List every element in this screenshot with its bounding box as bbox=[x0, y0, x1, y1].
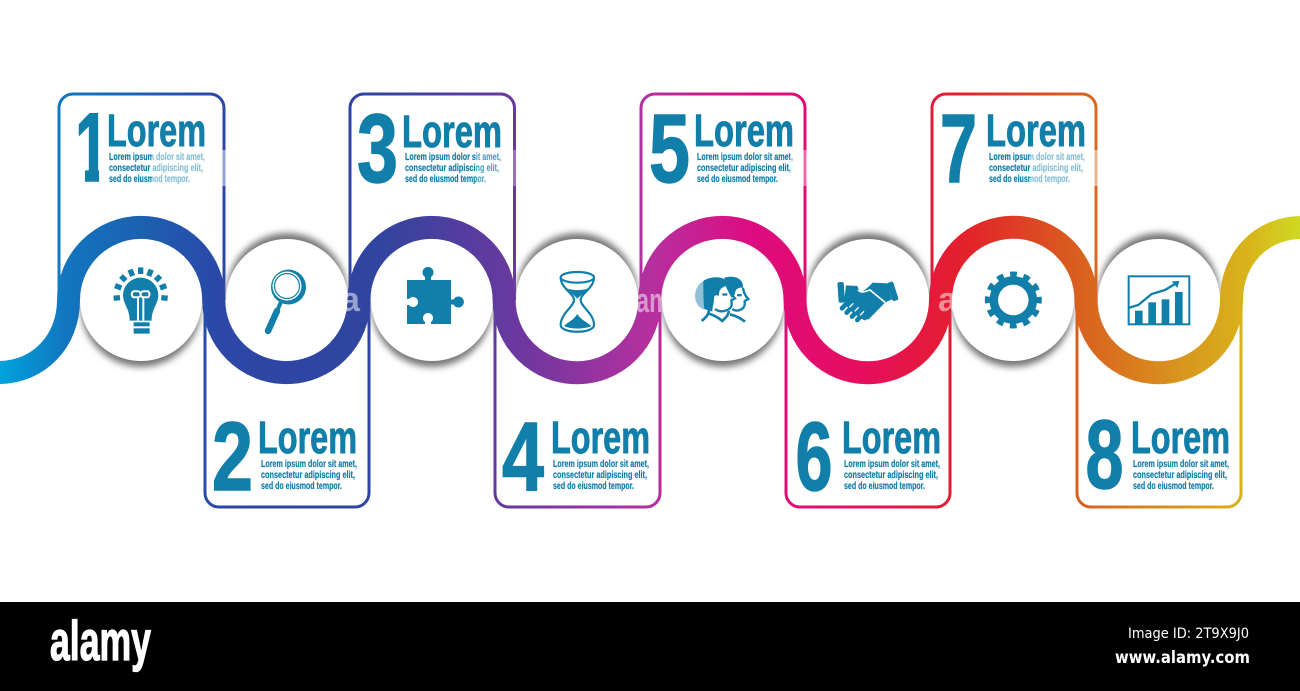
icon: puzzle piece bbox=[407, 267, 464, 324]
alamy logo: alamy bbox=[50, 609, 151, 672]
step 5 text: consectetur adipiscing elit, bbox=[697, 163, 791, 174]
step 2 text: sed do eiusmod tempor. bbox=[261, 481, 342, 492]
icon: light bulb bbox=[114, 267, 168, 334]
icon: growth chart bbox=[1129, 276, 1189, 324]
icon: magnifying glass bbox=[268, 270, 306, 331]
circle shadows bbox=[81, 233, 1219, 367]
website: www.alamy.com bbox=[1115, 648, 1250, 668]
step 6 text: sed do eiusmod tempor. bbox=[844, 481, 925, 492]
step 3 text bbox=[357, 94, 502, 203]
step 2 text: Lorem ipsum dolor sit amet, bbox=[261, 459, 357, 470]
step 8 text: Lorem bbox=[1131, 412, 1230, 463]
step 7 text: 7 bbox=[940, 94, 977, 203]
step 3 text: sed do eiusmod tempor. bbox=[405, 174, 486, 185]
watermark fade: a bbox=[938, 281, 958, 319]
white circles bbox=[80, 239, 1220, 361]
step 6 text: consectetur adipiscing elit, bbox=[844, 470, 938, 481]
step 1 text bbox=[78, 113, 205, 184]
step 4 text: Lorem bbox=[551, 412, 650, 463]
step 5 text: sed do eiusmod tempor. bbox=[697, 174, 778, 185]
box outlines bbox=[59, 94, 1241, 507]
step 3 text: 3 bbox=[357, 94, 398, 203]
step 7 text: consectetur adipiscing elit, bbox=[989, 163, 1083, 174]
step 2 text: 2 bbox=[212, 402, 253, 511]
step 1 text: Lorem bbox=[107, 105, 206, 156]
step 6 text: 6 bbox=[796, 402, 832, 511]
step 1 text: consectetur adipiscing elit, bbox=[109, 163, 203, 174]
gradient ribbon bbox=[0, 227, 1300, 373]
image id: Image ID: 2T9X9J0 bbox=[1128, 626, 1249, 642]
step 7 text bbox=[940, 94, 1086, 203]
step 3 text: consectetur adipiscing elit, bbox=[405, 163, 499, 174]
icon: handshake bbox=[837, 281, 899, 320]
step 1 text: 1 bbox=[75, 93, 109, 202]
step 2 text: consectetur adipiscing elit, bbox=[261, 470, 355, 481]
step 6 text: Lorem ipsum dolor sit amet, bbox=[844, 459, 940, 470]
watermark fade: am bbox=[636, 282, 670, 320]
step 8 text: 8 bbox=[1086, 400, 1124, 509]
step 8 text bbox=[1086, 400, 1230, 509]
watermark fade bbox=[152, 150, 1098, 320]
step 4 text bbox=[502, 402, 650, 511]
step 8 text: sed do eiusmod tempor. bbox=[1133, 481, 1214, 492]
watermark fade: a bbox=[341, 281, 361, 319]
step 2 text: Lorem bbox=[258, 412, 357, 463]
step 3 text: Lorem ipsum dolor sit amet, bbox=[405, 152, 501, 163]
step 4 text: Lorem ipsum dolor sit amet, bbox=[553, 459, 649, 470]
footer bar bbox=[0, 602, 1300, 691]
step 4 text: consectetur adipiscing elit, bbox=[553, 470, 647, 481]
step 1 text: sed do eiusmod tempor. bbox=[109, 174, 190, 185]
step 7 text: Lorem bbox=[986, 105, 1086, 156]
step 2 text bbox=[212, 402, 357, 511]
step 5 text: 5 bbox=[649, 94, 690, 203]
step 1 text: Lorem ipsum dolor sit amet, bbox=[109, 152, 205, 163]
icon: two people profiles bbox=[695, 277, 748, 322]
step 7 text: sed do eiusmod tempor. bbox=[989, 174, 1070, 185]
step 6 text: Lorem bbox=[842, 412, 941, 463]
step 4 text: sed do eiusmod tempor. bbox=[553, 481, 634, 492]
step 5 text: Lorem ipsum dolor sit amet, bbox=[697, 152, 793, 163]
icon: gear bbox=[988, 274, 1039, 326]
step 5 text: Lorem bbox=[694, 105, 794, 156]
step 5 text bbox=[649, 94, 794, 203]
step 8 text: consectetur adipiscing elit, bbox=[1133, 470, 1227, 481]
step 3 text: Lorem bbox=[402, 106, 502, 157]
step 4 text: 4 bbox=[502, 402, 544, 511]
step 8 text: Lorem ipsum dolor sit amet, bbox=[1133, 459, 1229, 470]
icon: hourglass bbox=[561, 272, 594, 332]
step 7 text: Lorem ipsum dolor sit amet, bbox=[989, 152, 1085, 163]
step 6 text bbox=[796, 402, 941, 511]
